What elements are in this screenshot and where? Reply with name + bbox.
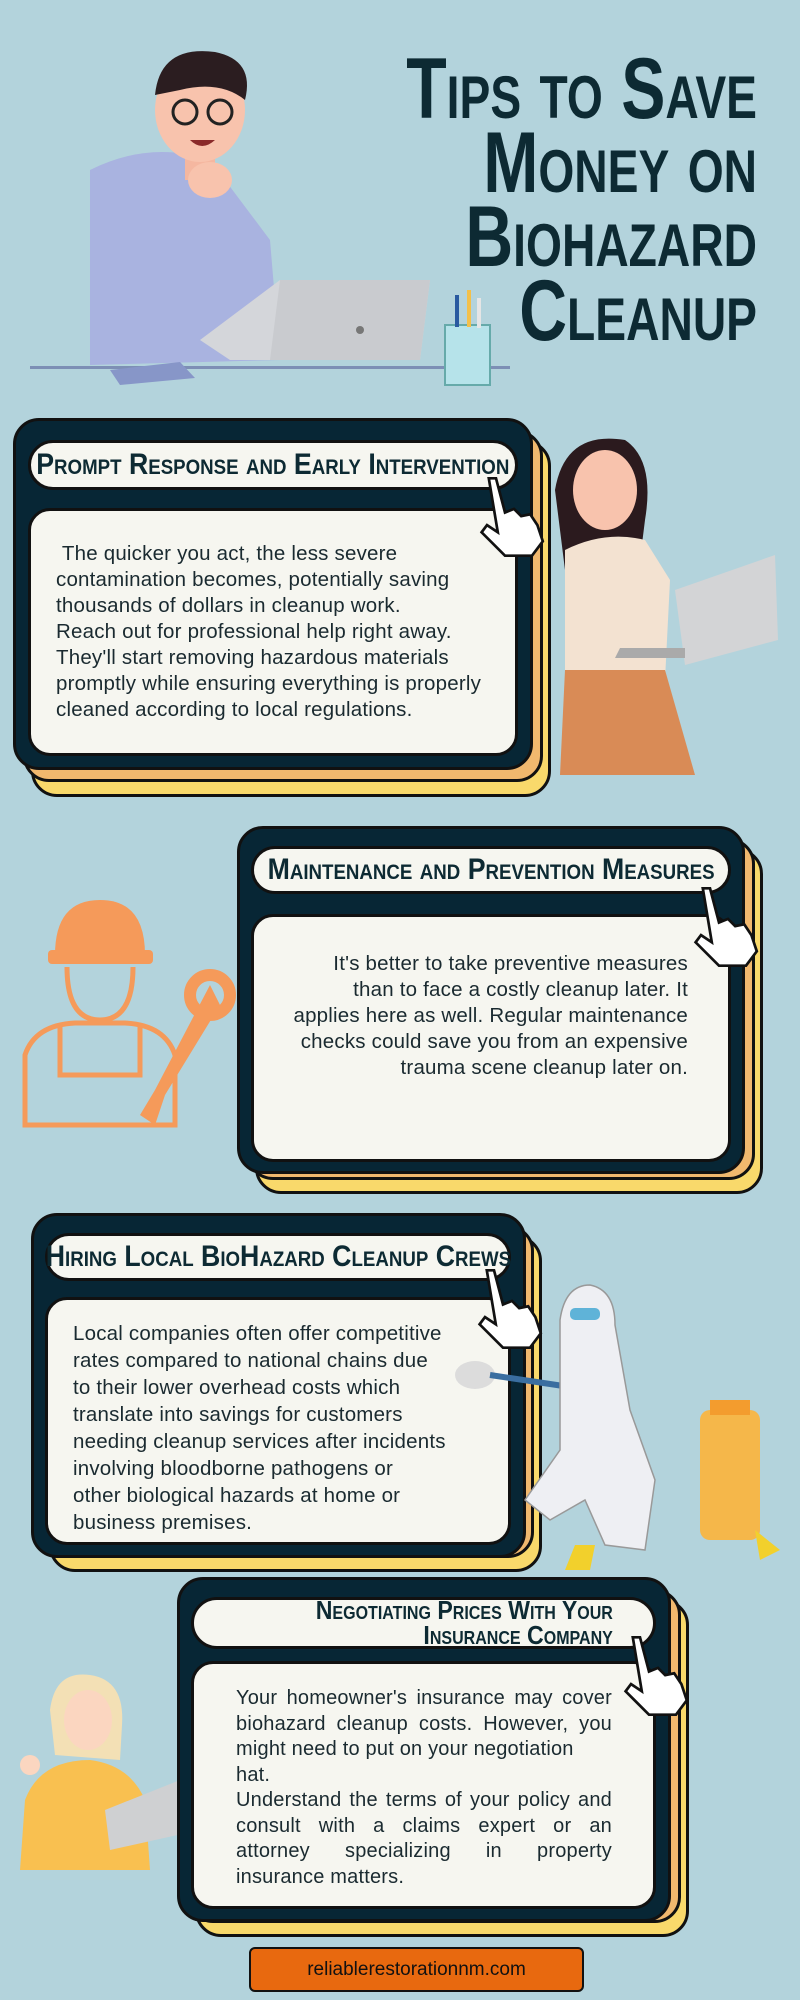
text block: prompt response: promptly while ensuring everything is properly [56, 672, 481, 695]
illustration: blonde woman with laptop [20, 1674, 177, 1870]
text block: hiring local: Local companies often offer competitive [73, 1322, 442, 1345]
text block: maintenance: checks could save you from an expensive [301, 1030, 688, 1053]
text block: prompt response: cleaned according to local regulations. [56, 698, 413, 721]
text block: hiring local [45, 1297, 511, 1545]
footer: website button [249, 1947, 584, 1992]
text block: negotiating prices: Understand the terms of your policy and consult with a claims expert or an attorney specializing in property insurance matters. [236, 1789, 612, 1888]
panel: maintenance [237, 826, 763, 1194]
footer: website button: reliablerestorationnm.com [307, 1958, 526, 1980]
illustration: hazmat worker with sprayer [455, 1284, 780, 1570]
icon: cursor hand [478, 1269, 542, 1349]
text block: maintenance: trauma scene cleanup later on. [401, 1056, 688, 1079]
title: Tips to Save [406, 41, 757, 137]
text block: hiring local: needing cleanup services after incidents [73, 1430, 446, 1453]
heading: prompt response [28, 440, 518, 490]
icon: worker with wrench [22, 900, 236, 1128]
icon: cursor hand [694, 887, 758, 967]
text block: maintenance [251, 914, 731, 1162]
heading: maintenance: Maintenance and Prevention Measures [268, 853, 714, 886]
title [406, 41, 757, 359]
text block: hiring local: translate into savings for customers [73, 1403, 403, 1426]
text block: prompt response: Reach out for professional help right away. [56, 620, 452, 643]
illustration: woman with laptop [555, 438, 778, 775]
text block: prompt response: thousands of dollars in cleanup work. [56, 594, 401, 617]
text block: prompt response: The quicker you act, the less severe [62, 542, 397, 565]
text block: maintenance: It's better to take preventive measures [333, 952, 688, 975]
title: Cleanup [519, 263, 757, 359]
heading: hiring local [45, 1233, 511, 1281]
text block: negotiating prices: hat. [236, 1764, 270, 1786]
text block: prompt response [28, 508, 518, 756]
title: Biohazard [465, 189, 757, 285]
text block: maintenance: than to face a costly cleanup later. It [353, 978, 688, 1001]
text block: hiring local: to their lower overhead costs which [73, 1376, 400, 1399]
text block: negotiating prices: Your homeowner's insurance may cover biohazard cleanup costs. However, you might need to put on your negotiation [236, 1687, 612, 1760]
text block: hiring local: business premises. [73, 1511, 252, 1534]
icon: cursor hand [480, 477, 544, 557]
text block: hiring local: other biological hazards at home or [73, 1484, 400, 1507]
title: Money on [483, 115, 757, 211]
panel: hiring local [31, 1213, 542, 1572]
text block: maintenance: applies here as well. Regular maintenance [293, 1004, 688, 1027]
text block: negotiating prices [191, 1661, 656, 1909]
heading: negotiating prices [191, 1597, 656, 1649]
text block: prompt response: They'll start removing hazardous materials [56, 646, 449, 669]
text block: hiring local: involving bloodborne pathogens or [73, 1457, 393, 1480]
text block: hiring local: rates compared to national chains due [73, 1349, 428, 1372]
panel: negotiating prices [177, 1577, 689, 1937]
heading: prompt response: Prompt Response and Early Intervention [36, 448, 510, 481]
heading: negotiating prices: Negotiating Prices With Your [316, 1595, 613, 1625]
heading: hiring local: Hiring Local BioHazard Cleanup Crews [45, 1240, 511, 1273]
text block: prompt response: contamination becomes, potentially saving [56, 568, 449, 591]
panel: prompt response [13, 418, 551, 797]
heading: negotiating prices: Insurance Company [424, 1620, 613, 1650]
illustration: man with laptop [30, 51, 510, 386]
heading: maintenance [251, 846, 731, 894]
icon: cursor hand [624, 1636, 686, 1716]
